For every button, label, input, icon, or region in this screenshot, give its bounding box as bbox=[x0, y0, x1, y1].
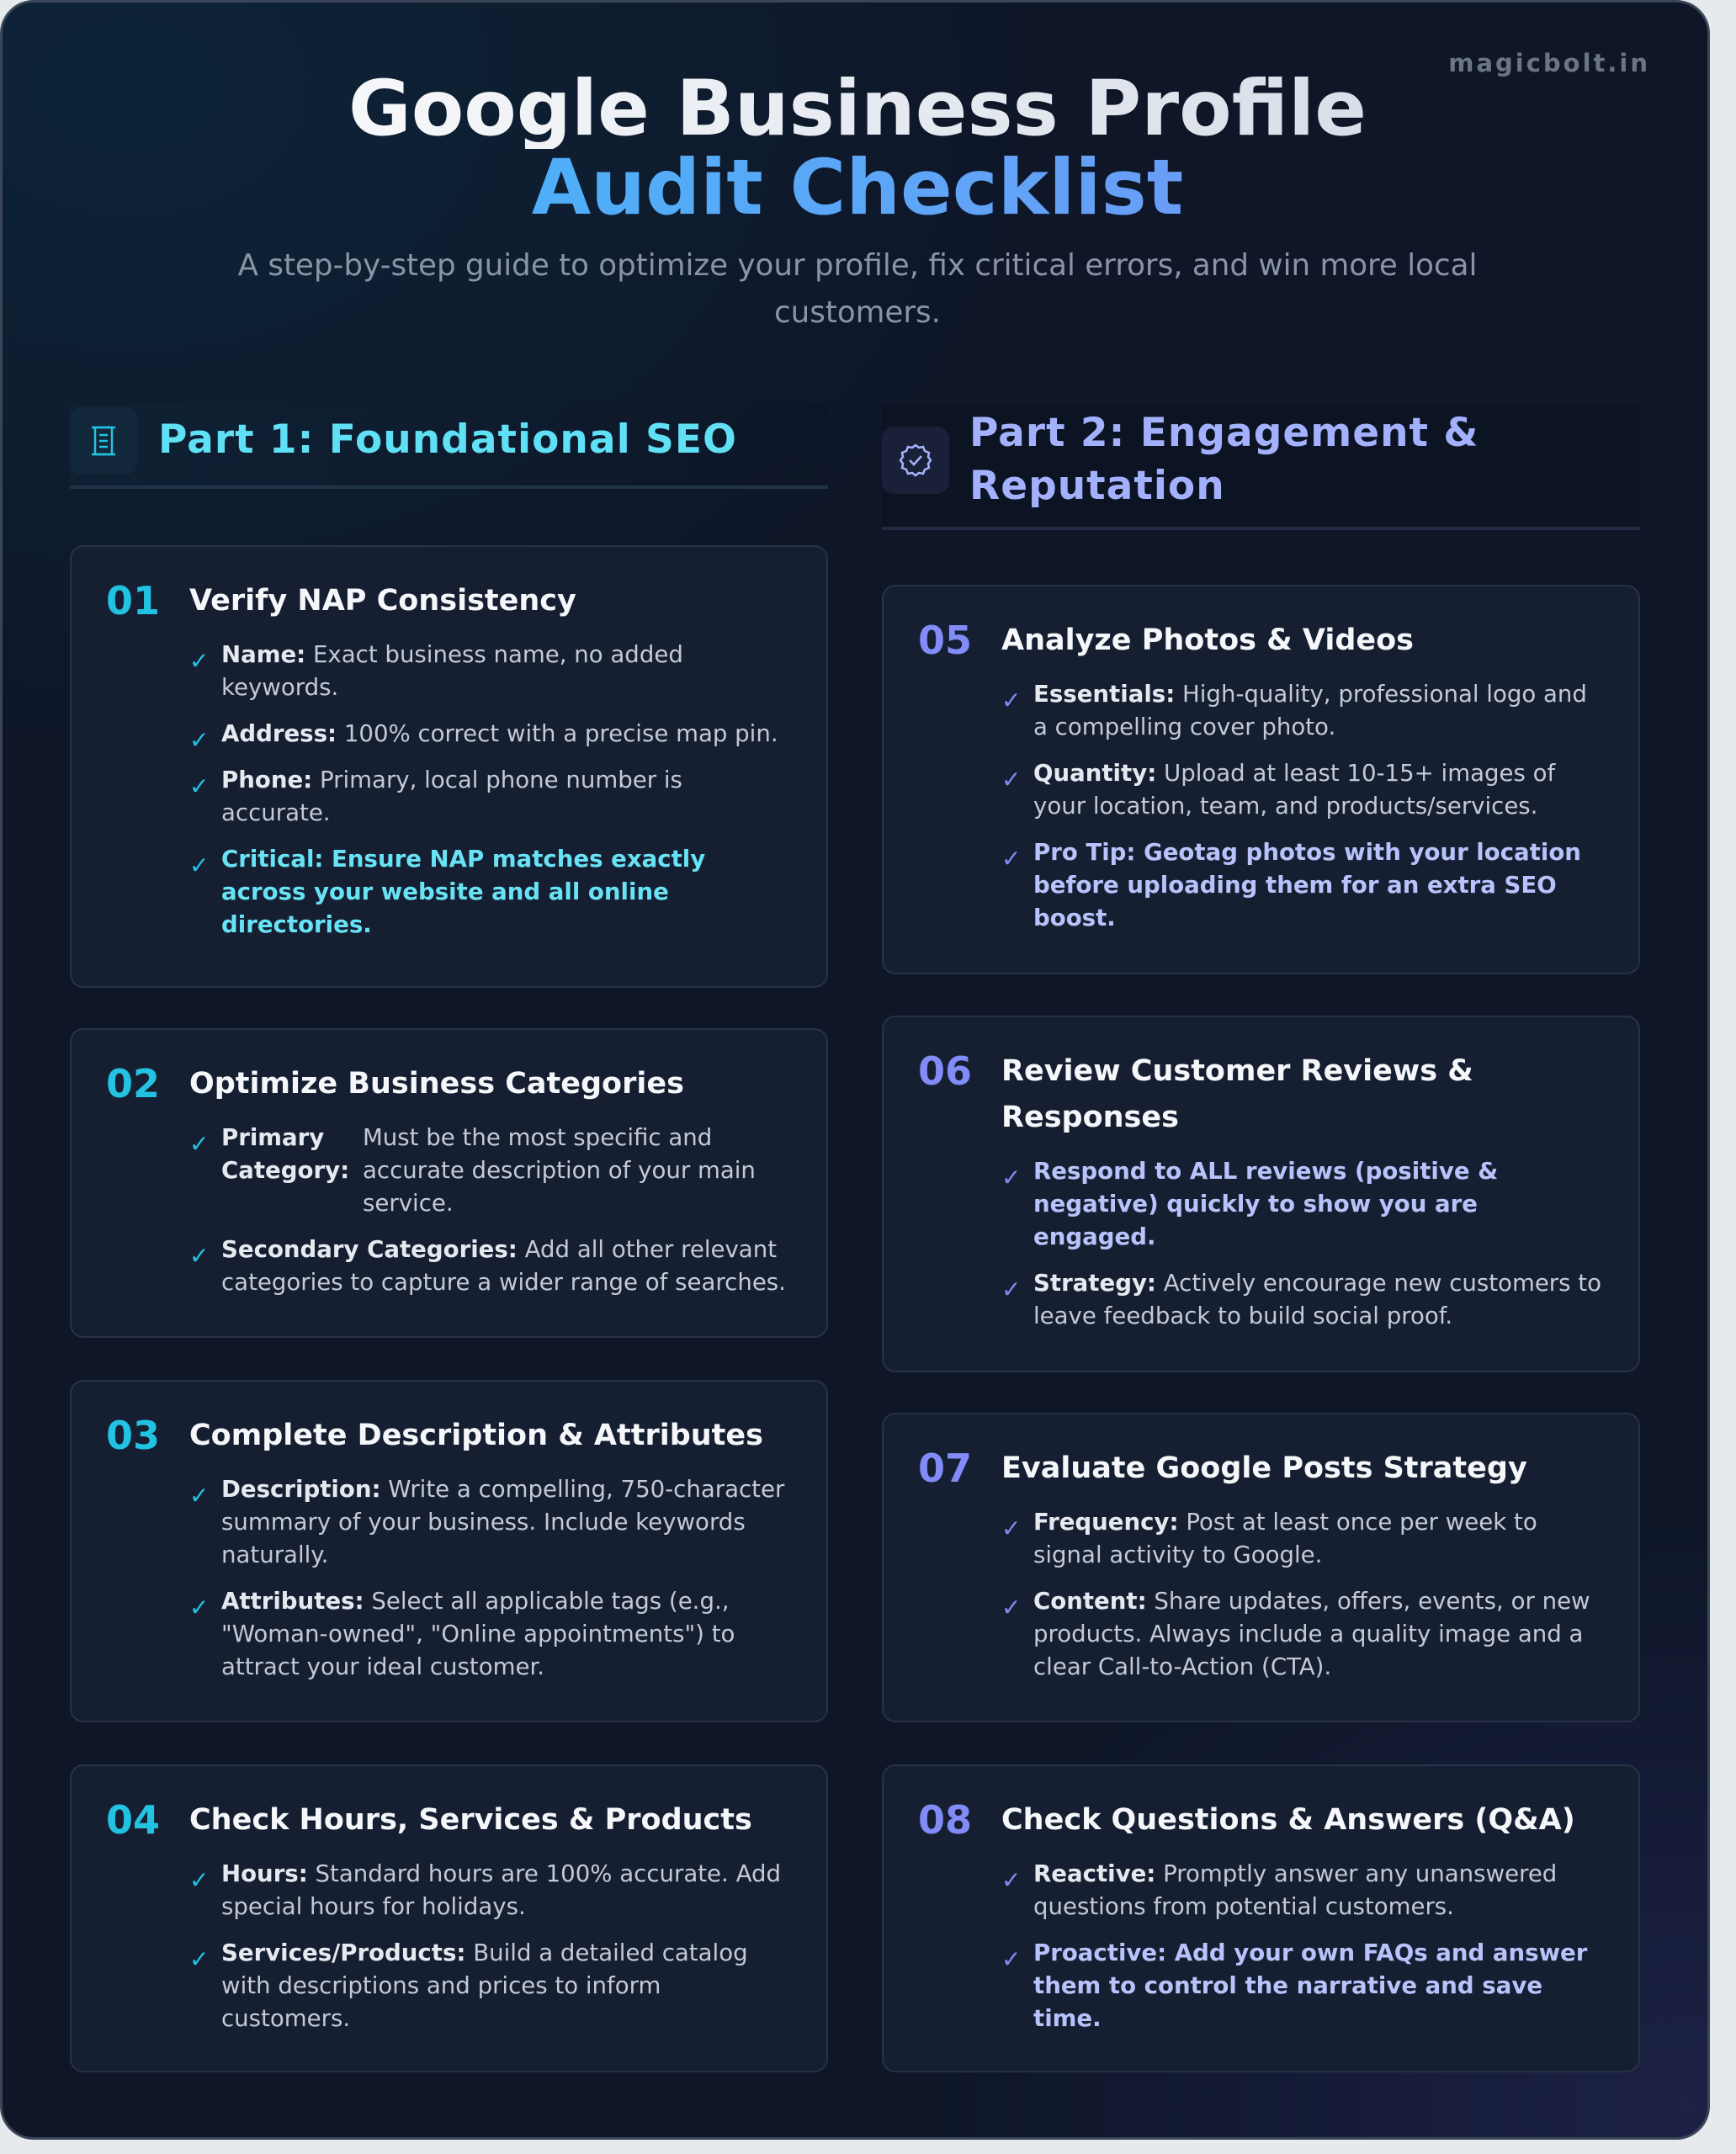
card 05: ✓ bbox=[1001, 845, 1021, 873]
card 03: Description: Write a compelling, 750‑character summary of your business. Include keywords naturally. bbox=[221, 1475, 784, 1568]
card 05: Essentials: High-quality, professional logo and a compelling cover photo. bbox=[1033, 680, 1587, 740]
heading text: Part 2: Engagement & bbox=[969, 410, 1479, 456]
card 05: Quantity: Upload at least 10-15+ images of your location, team, and products/services. bbox=[1033, 759, 1555, 820]
card 03: ✓ bbox=[189, 1482, 209, 1509]
card 01: Verify NAP Consistency bbox=[189, 584, 576, 618]
title: Audit Checklist bbox=[532, 144, 1183, 232]
card 01: ✓ bbox=[189, 852, 209, 879]
heading text: Part 1: Foundational SEO bbox=[158, 416, 737, 463]
card 01: Name: Exact business name, no added keywords. bbox=[221, 640, 683, 701]
card 02: Must be the most specific and accurate description of your main service. bbox=[363, 1123, 756, 1217]
heading: part 2 bbox=[882, 405, 1640, 530]
title bbox=[348, 65, 1367, 232]
card 07: Evaluate Google Posts Strategy bbox=[1001, 1451, 1527, 1485]
card 01: Address: 100% correct with a precise map pin. bbox=[221, 719, 778, 747]
card 05 bbox=[882, 585, 1640, 974]
card 04: Services/Products: Build a detailed catalog with descriptions and prices to inform customers. bbox=[221, 1939, 748, 2032]
card 04: Check Hours, Services & Products bbox=[189, 1803, 752, 1837]
card 06: Review Customer Reviews & Responses bbox=[1001, 1054, 1473, 1134]
card 03: ✓ bbox=[189, 1594, 209, 1621]
heading: part 1 bbox=[70, 405, 828, 489]
title: Google Business Profile bbox=[348, 65, 1367, 153]
card 07: Frequency: Post at least once per week to signal activity to Google. bbox=[1033, 1508, 1537, 1568]
card 03: Complete Description & Attributes bbox=[189, 1419, 763, 1452]
card 07: ✓ bbox=[1001, 1515, 1021, 1542]
card 05: Analyze Photos & Videos bbox=[1001, 623, 1414, 657]
card 05: ✓ bbox=[1001, 687, 1021, 714]
card 03: Attributes: Select all applicable tags (e.g., "Woman-owned", "Online appointments") to attract your ideal customer. bbox=[221, 1587, 735, 1680]
card 01: ✓ bbox=[189, 647, 209, 675]
card 05: ✓ bbox=[1001, 766, 1021, 793]
brand label: magicbolt.in bbox=[1448, 49, 1650, 77]
card 05: Pro Tip: Geotag photos with your location before uploading them for an extra SEO boost. bbox=[1033, 838, 1581, 931]
card 01: ✓ bbox=[189, 726, 209, 754]
card 02: Optimize Business Categories bbox=[189, 1067, 684, 1101]
heading text bbox=[969, 410, 1479, 509]
card 07 bbox=[882, 1413, 1640, 1722]
card 04: 04 bbox=[106, 1797, 160, 1843]
card 08: Reactive: Promptly answer any unanswered questions from potential customers. bbox=[1033, 1860, 1557, 1920]
card 06: ✓ bbox=[1001, 1276, 1021, 1303]
card 08: ✓ bbox=[1001, 1866, 1021, 1894]
card 08: 08 bbox=[918, 1797, 972, 1843]
card 03: 03 bbox=[106, 1413, 160, 1458]
card 07: 07 bbox=[918, 1446, 972, 1491]
card 05: 05 bbox=[918, 618, 972, 663]
card 06: 06 bbox=[918, 1048, 972, 1094]
icon: badge check bbox=[882, 427, 949, 494]
card 08 bbox=[882, 1764, 1640, 2072]
card 01: Phone: Primary, local phone number is accurate. bbox=[221, 766, 682, 826]
card 02: Primary Category: bbox=[221, 1123, 349, 1184]
heading text: Reputation bbox=[969, 463, 1225, 509]
card 01: Critical: Ensure NAP matches exactly across your website and all online directories. bbox=[221, 845, 705, 938]
card 02: Secondary Categories: Add all other relevant categories to capture a wider range of searches. bbox=[221, 1235, 786, 1296]
card 04: ✓ bbox=[189, 1945, 209, 1973]
card 02 bbox=[70, 1028, 828, 1338]
card 04 bbox=[70, 1764, 828, 2072]
card 08: ✓ bbox=[1001, 1945, 1021, 1973]
card 07: Content: Share updates, offers, events, or new products. Always include a quality image and a clear Call-to-Action (CTA). bbox=[1033, 1587, 1590, 1680]
card 01 bbox=[70, 545, 828, 988]
card 06: Strategy: Actively encourage new customers to leave feedback to build social proof. bbox=[1033, 1269, 1601, 1329]
card 03 bbox=[70, 1380, 828, 1722]
card 04: Hours: Standard hours are 100% accurate. Add special hours for holidays. bbox=[221, 1860, 781, 1920]
card 02: ✓ bbox=[189, 1130, 209, 1158]
subtitle: A step-by-step guide to optimize your profile, fix critical errors, and win more local customers. bbox=[238, 248, 1477, 330]
icon: document bbox=[70, 407, 137, 475]
card 06: Respond to ALL reviews (positive & negative) quickly to show you are engaged. bbox=[1033, 1157, 1498, 1250]
card 06 bbox=[882, 1016, 1640, 1372]
card 08: Check Questions & Answers (Q&A) bbox=[1001, 1803, 1575, 1837]
card 01: 01 bbox=[106, 578, 160, 623]
card 07: ✓ bbox=[1001, 1594, 1021, 1621]
card 01: ✓ bbox=[189, 772, 209, 800]
card 02: 02 bbox=[106, 1061, 160, 1106]
card 06: ✓ bbox=[1001, 1164, 1021, 1191]
card 04: ✓ bbox=[189, 1866, 209, 1894]
card 08: Proactive: Add your own FAQs and answer them to control the narrative and save time. bbox=[1033, 1939, 1587, 2032]
card 02: ✓ bbox=[189, 1242, 209, 1270]
